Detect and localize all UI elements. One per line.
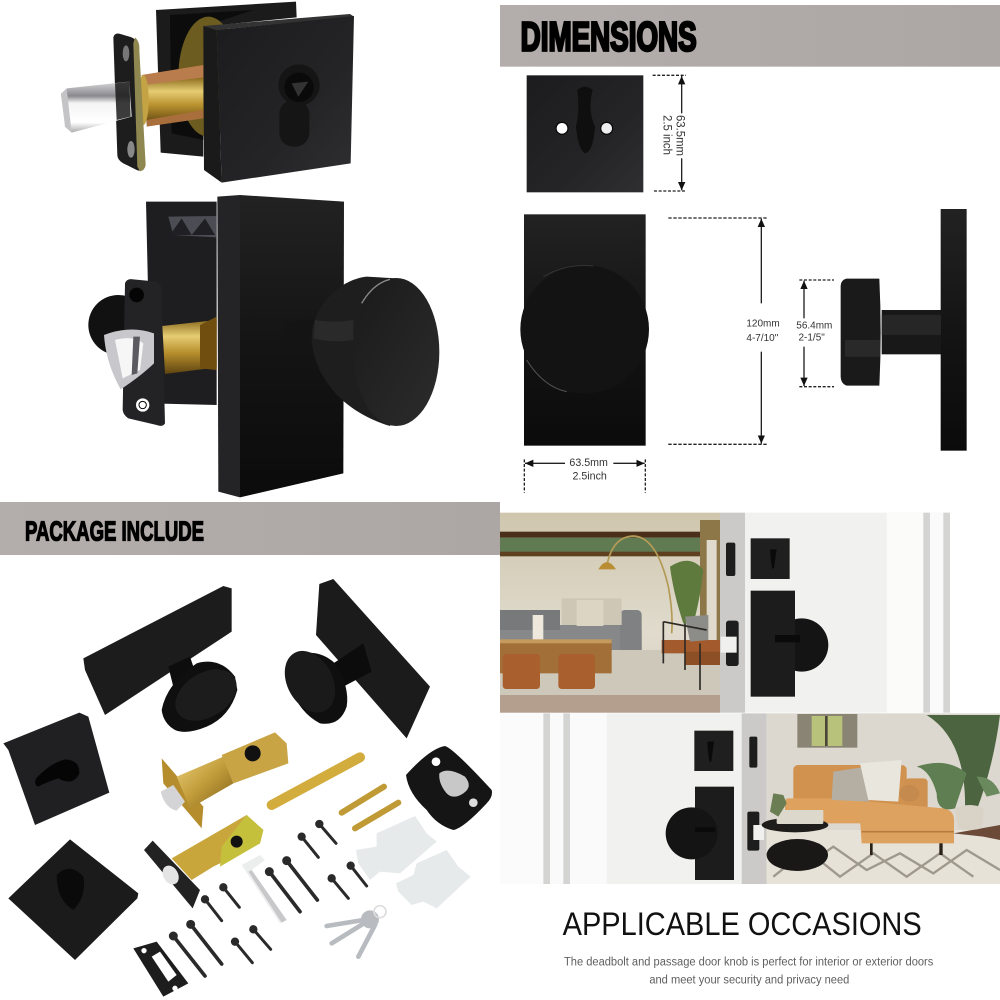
description text: The deadbolt and passage door knob is perfect for interior or exterior doors	[564, 955, 933, 969]
dimension: plate width	[524, 457, 645, 493]
dimension: plate width: 63.5mm	[569, 457, 608, 469]
header band: package include: PACKAGE INCLUDE	[25, 516, 204, 547]
dimension: knob diameter: 2-1/5"	[799, 333, 825, 344]
dimension: knob diameter	[796, 280, 834, 387]
dimension: knob plate height	[668, 218, 780, 444]
knob with plate, left	[83, 586, 246, 732]
description text	[564, 955, 933, 986]
screws	[170, 821, 367, 976]
header band: package include	[0, 502, 500, 555]
panel: dimensions	[500, 5, 1000, 493]
dimension: plate height	[653, 75, 688, 191]
panel: applicable occasions	[500, 513, 1000, 986]
gold latch	[161, 732, 288, 828]
dimension: plate width: 2.5inch	[572, 470, 607, 482]
description text: and meet your security and privacy need	[649, 972, 849, 986]
dimension: plate height: 63.5mm	[674, 115, 688, 156]
small strike plate	[133, 942, 188, 997]
keys	[327, 906, 386, 957]
hex key	[242, 855, 287, 923]
panel: package include	[0, 502, 500, 997]
room photo: orange sofa and plant	[762, 713, 1000, 884]
header band: dimensions	[500, 5, 1000, 67]
dimension: knob diameter: 56.4mm	[796, 321, 832, 332]
knob front view	[520, 214, 649, 446]
spindle	[272, 757, 360, 805]
deadbolt assembly	[61, 2, 354, 183]
mounting pins	[342, 787, 398, 828]
door photo: installed hardware, top	[720, 513, 950, 713]
clear plastic parts	[356, 816, 471, 908]
dimension: knob plate height: 4-7/10"	[746, 333, 779, 344]
brass latch with black faceplate	[144, 815, 263, 908]
knob side view	[841, 209, 967, 451]
heading: applicable occasions: APPLICABLE OCCASIONS	[563, 906, 922, 942]
header band: dimensions: DIMENSIONS	[521, 14, 697, 60]
dimension: plate height: 2.5 inch	[660, 115, 674, 155]
square thumb turn plate	[527, 75, 643, 192]
keyed deadbolt plate	[3, 713, 109, 825]
door photo: installed hardware, bottom	[500, 713, 767, 884]
panel: product photo deadbolt and knob	[61, 2, 439, 497]
strike plate with silver opening	[406, 746, 492, 830]
dimension: knob plate height: 120mm	[746, 319, 780, 330]
room photo: living room with arc lamp	[500, 513, 720, 713]
knob assembly	[88, 195, 439, 497]
thumb turn deadbolt plate	[8, 839, 138, 960]
knob with plate, right	[275, 579, 430, 738]
